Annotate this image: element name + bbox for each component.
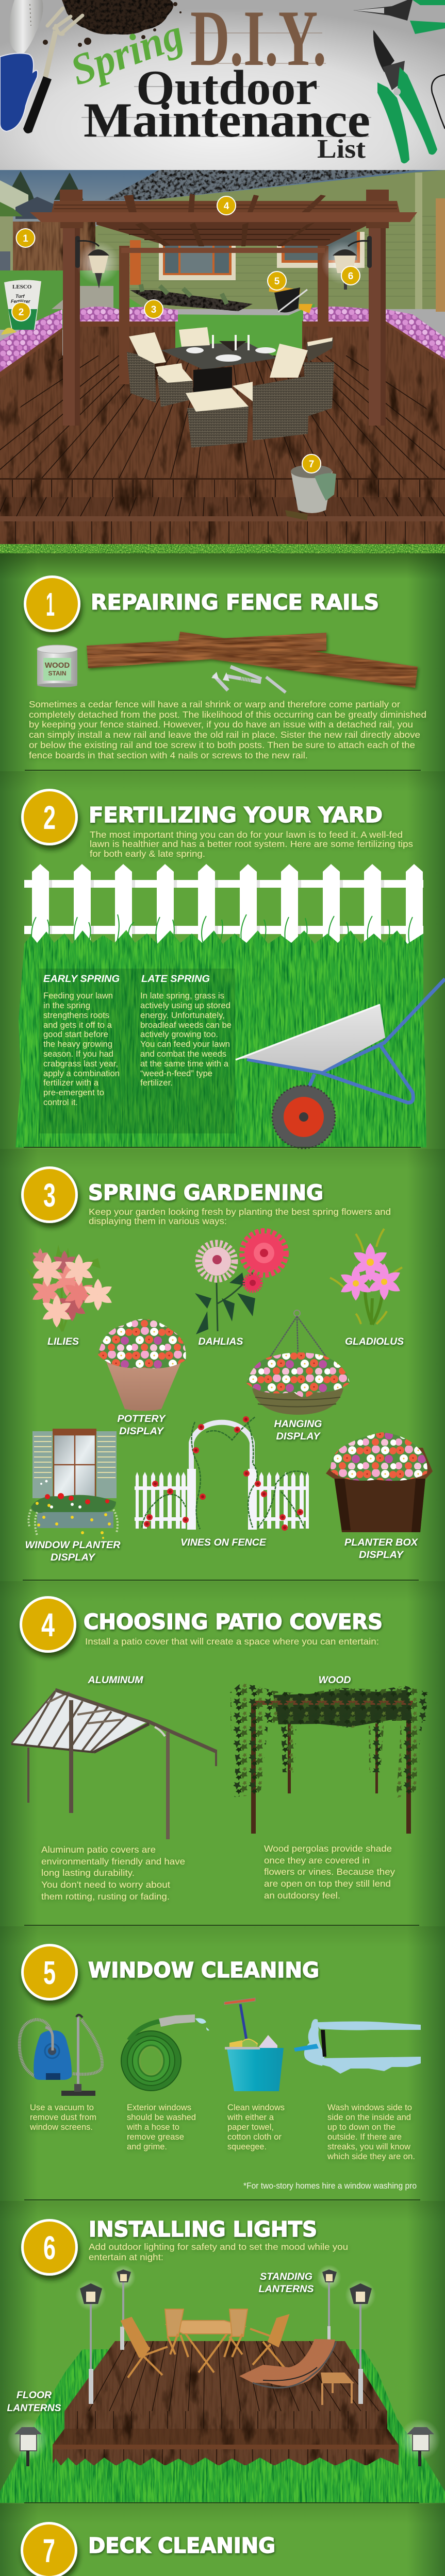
aluminum text: long lasting durability. [41,1868,135,1878]
label: DISPLAY [119,1426,164,1437]
heading: REPAIRING FENCE RAILS [91,590,379,615]
step text: vacuum: Use a vacuum to [30,2103,94,2112]
description text: fence boards in that section with 4 nails or screws to the new rail. [29,750,308,760]
icon: small green shears [353,0,445,34]
step text: hose [126,2103,196,2151]
section 1: repairing fence rails [24,575,426,760]
section 5: window cleaning [20,1944,421,2191]
title line: List: List [317,134,366,164]
step text: hose: Exterior windows [127,2103,191,2112]
label: DAHLIAS [198,1336,243,1347]
early spring column: EARLY SPRING [43,974,120,985]
label: STANDING [260,2272,312,2282]
deck floor [0,355,445,478]
icon: wall lanterns [75,236,372,290]
patio table and chairs [121,2309,289,2378]
icon: screws [211,667,286,692]
grass strip [0,544,445,553]
description text [29,699,426,760]
description text: or below the existing rail and toe screw it to both posts. Then be sure to attach each of the [29,740,415,750]
wood text: once they are covered in [264,1855,370,1866]
illustration: vines on fence [135,1416,309,1531]
aluminum text: You don't need to worry about [41,1879,170,1890]
deck steps [0,478,445,544]
illustration: lilies [26,1245,114,1331]
late spring column: You can feed your lawn [140,1039,230,1049]
number badge 3 [21,1166,78,1223]
heading: CHOOSING PATIO COVERS [84,1609,383,1634]
number badge 1 [24,575,80,632]
aluminum text: environmentally friendly and have [41,1856,185,1867]
late spring column: fertilizer. [140,1078,173,1088]
aluminum text [41,1844,185,1902]
description text: completely detached from the post. The likelihood of this occurring can be greatly diminished [29,709,426,720]
illustration: wood pergola [230,1682,428,1834]
intro text: lawn is healthier and has a better root system. Here are some fertilizing tips [90,839,413,849]
illustration: aluminum patio cover [11,1690,217,1839]
heading: INSTALLING LIGHTS [89,2217,317,2242]
late spring column [140,974,232,1088]
panel: backyard deck scene: 3 [151,304,156,315]
label: DISPLAY [276,1431,321,1442]
step text: vacuum: window screens. [29,2122,93,2132]
icon: garden hose [121,2014,209,2091]
step text: hose: remove grease [127,2132,184,2142]
step text: sides: Wash windows side to [327,2103,412,2112]
section 3: spring gardening [21,1166,433,1563]
intro text: The most important thing you can do for your lawn is to feed it. A well-fed [90,829,403,840]
step text: vacuum: remove dust from [30,2112,96,2122]
icon: fertilizer bag: LESCO [12,284,32,290]
early spring column: fertilizer with a [43,1078,99,1088]
outdoor dining furniture [127,327,334,448]
wood text [264,1843,395,1901]
icon: hand trowel [9,0,43,56]
sun lounger [239,2339,354,2405]
house siding [95,170,445,309]
early spring column: in the spring [43,1001,90,1010]
aluminum text: them rotting, rusting or fading. [41,1891,170,1902]
footnote: *For two-story homes hire a window washing pro [243,2181,417,2191]
step text: towel: paper towel, [227,2122,274,2132]
early spring column: control it. [43,1097,78,1107]
panel: green background [0,553,445,2576]
intro text: displaying them in various ways: [89,1216,227,1226]
step text: towel [227,2103,285,2151]
label [118,1414,167,1437]
section 2: fertilizing your yard [15,789,445,1148]
icon: bucket and squeegee [224,1998,284,2091]
step text: sides: streaks, you will know [327,2142,411,2151]
label: HANGING [274,1419,322,1430]
icon: wood stain can [37,645,77,687]
white picket fence [24,864,423,945]
step text: hose: and grime. [127,2142,167,2151]
early spring column: season. If you had [43,1049,113,1059]
early spring column: pre-emergent to [43,1088,104,1097]
icon: standing lanterns [75,2265,376,2404]
lawn panel [15,914,426,1147]
illustration: planter box [326,1432,433,1532]
label: WOOD [319,1675,351,1686]
number badge 5 [21,1944,78,2001]
door and windows [130,232,365,285]
section 7: deck cleaning [19,2522,276,2576]
intro text: Add outdoor lighting for safety and to set the mood while you [89,2242,348,2252]
step text: towel: Clean windows [227,2103,285,2112]
intro text: for both early & late spring. [90,849,205,859]
icon: bucket with rag and brush [285,465,336,520]
intro text: entertain at night: [89,2252,163,2262]
label: POTTERY [118,1414,167,1425]
label: VINES ON FENCE [180,1537,267,1548]
title [64,0,371,164]
step text: towel: cotton cloth or [227,2132,282,2142]
pergola [30,190,417,426]
wooden deck [53,2341,399,2465]
description text: by keeping your fence stained. However, if you do have an issue with a detached rail, you [29,719,413,730]
label [259,2272,314,2295]
lawn mound [0,2349,445,2503]
wood text: flowers or vines. Because they [264,1867,395,1877]
wood text: are open on top they still lend [264,1878,391,1889]
heading: SPRING GARDENING [88,1180,323,1205]
icon: wood stain can: WOOD [45,661,70,670]
soil pile [43,0,182,47]
late spring column: at the same time with a [140,1059,229,1069]
backyard fence [13,222,95,271]
step text: vacuum [29,2103,96,2132]
number badge 5: 5 [43,1954,56,1991]
heading: DECK CLEANING [88,2533,275,2558]
label: LANTERNS [7,2403,61,2414]
wood planks [87,632,418,688]
number badge 2: 2 [43,799,56,836]
number badge 7: 7 [43,2532,55,2569]
number badge 6: 6 [43,2229,56,2266]
panel: backyard deck scene: 6 [348,271,353,282]
icon: bucket and squeegee [269,285,312,313]
illustration: window planter [28,1429,118,1539]
label [274,1419,322,1442]
icon: soap streaks and squeegee [294,2019,421,2074]
icon: fertilizer bag [1,280,41,335]
step text: towel: with either a [227,2112,274,2122]
number badge 7 [21,2522,77,2576]
illustration: pottery display [98,1319,186,1411]
step text: sides: up to down on the [327,2122,395,2132]
late spring column: LATE SPRING [141,974,210,985]
late spring column: In late spring, grass is [140,991,224,1001]
label [344,1537,418,1561]
icon: green pruners [373,30,437,163]
early spring column: Feeding your lawn [43,991,113,1001]
panel: backyard deck scene: 5 [274,276,280,287]
description text: Sometimes a cedar fence will have a rail shrink or warp and therefore come partially or [29,699,400,709]
panel: backyard deck scene: 7 [309,459,314,470]
label: LILIES [47,1336,79,1347]
heading: WINDOW CLEANING [88,1958,319,1982]
early spring column: strengthens roots [43,1010,109,1020]
panel: backyard deck scene [0,170,445,544]
label [25,1540,121,1563]
step text: hose: should be washed [127,2112,196,2122]
icon: floor lanterns [7,2419,440,2466]
step text: towel: squeegee. [227,2142,267,2151]
label: LANTERNS [259,2284,314,2295]
label [7,2390,61,2414]
icon: wheelbarrow [236,979,445,1148]
illustration: dahlias [195,1232,285,1334]
panel: backyard deck scene: 1 [23,233,28,244]
early spring column: crabgrass last year, [43,1059,118,1069]
icon: fertilizer bag: Turf [15,294,25,299]
step text: hose: with a hose to [126,2122,179,2132]
heading: FERTILIZING YOUR YARD [89,803,383,827]
icon: blue dotted glove [0,53,38,131]
numbered markers [12,196,360,473]
number badge 2 [21,789,78,845]
label: FLOOR [17,2390,52,2401]
intro text [89,2242,348,2262]
illustration: gladiolus [330,1229,402,1325]
front grass [52,2458,400,2503]
step text: sides: side on the inside and [327,2112,411,2122]
description text: can simply install a new rail and leave the old rail in place. Sister the new rail directly above [29,730,420,740]
illustration: hanging display [246,1310,350,1415]
icon: wood stain can: STAIN [48,670,67,677]
number badge 3: 3 [43,1177,56,1214]
early spring column: the heavy growing [43,1039,112,1049]
icon: vacuum cleaner [20,2015,102,2096]
number badge 1: 1 [46,586,55,623]
early spring column: and gets it off to a [43,1020,112,1030]
early spring column: good start before [43,1029,108,1039]
late spring column: actively growing too. [140,1029,218,1039]
number badge 6 [21,2219,78,2276]
label: PLANTER BOX [344,1537,418,1548]
number badge 4: 4 [41,1606,55,1643]
intro text [90,829,413,859]
flower planters [0,307,445,432]
label: WINDOW PLANTER [25,1540,121,1551]
late spring column: “weed-n-feed” type [140,1069,212,1078]
step text: sides: which side they are on. [327,2151,415,2161]
late spring column: broadleaf weeds can be [140,1020,232,1030]
early spring column [43,974,120,1107]
intro text: Install a patio cover that will create a space where you can entertain: [85,1636,379,1647]
intro text [89,1207,391,1226]
early spring column: apply a combination [43,1069,120,1078]
panel: header [0,0,445,170]
label: ALUMINUM [87,1675,144,1686]
label: GLADIOLUS [345,1336,404,1347]
wood text: Wood pergolas provide shade [264,1843,392,1854]
panel: backyard deck scene: 2 [19,307,24,318]
intro text: Keep your garden looking fresh by planting the best spring flowers and [89,1207,391,1217]
step text: sides: outside. If there are [327,2132,402,2142]
house roof [105,170,417,200]
title line: Maintenance: Maintenance [84,93,370,147]
step text: sides [327,2103,415,2161]
number badge 4 [20,1596,76,1653]
title line: Spring: Spring [64,10,190,95]
aluminum text: Aluminum patio covers are [41,1844,156,1855]
label: DISPLAY [359,1550,404,1561]
section 4: choosing patio covers [11,1596,428,1902]
late spring column: and combat the weeds [140,1049,226,1059]
icon: fertilizer bag: Fertilizer [11,299,30,304]
label: DISPLAY [51,1552,96,1563]
trees and neighbour house [0,171,84,270]
late spring column: energy. Unfortunately, [140,1010,225,1020]
icon: hand rake [23,8,83,133]
panel: backyard deck scene: 4 [224,201,229,212]
lawn [0,270,315,355]
wood text: an outdoorsy feel. [264,1890,340,1901]
title line: Outdoor: Outdoor [136,60,318,115]
section 6: installing lights [0,2217,445,2503]
late spring column: actively using up stored [140,1001,230,1010]
